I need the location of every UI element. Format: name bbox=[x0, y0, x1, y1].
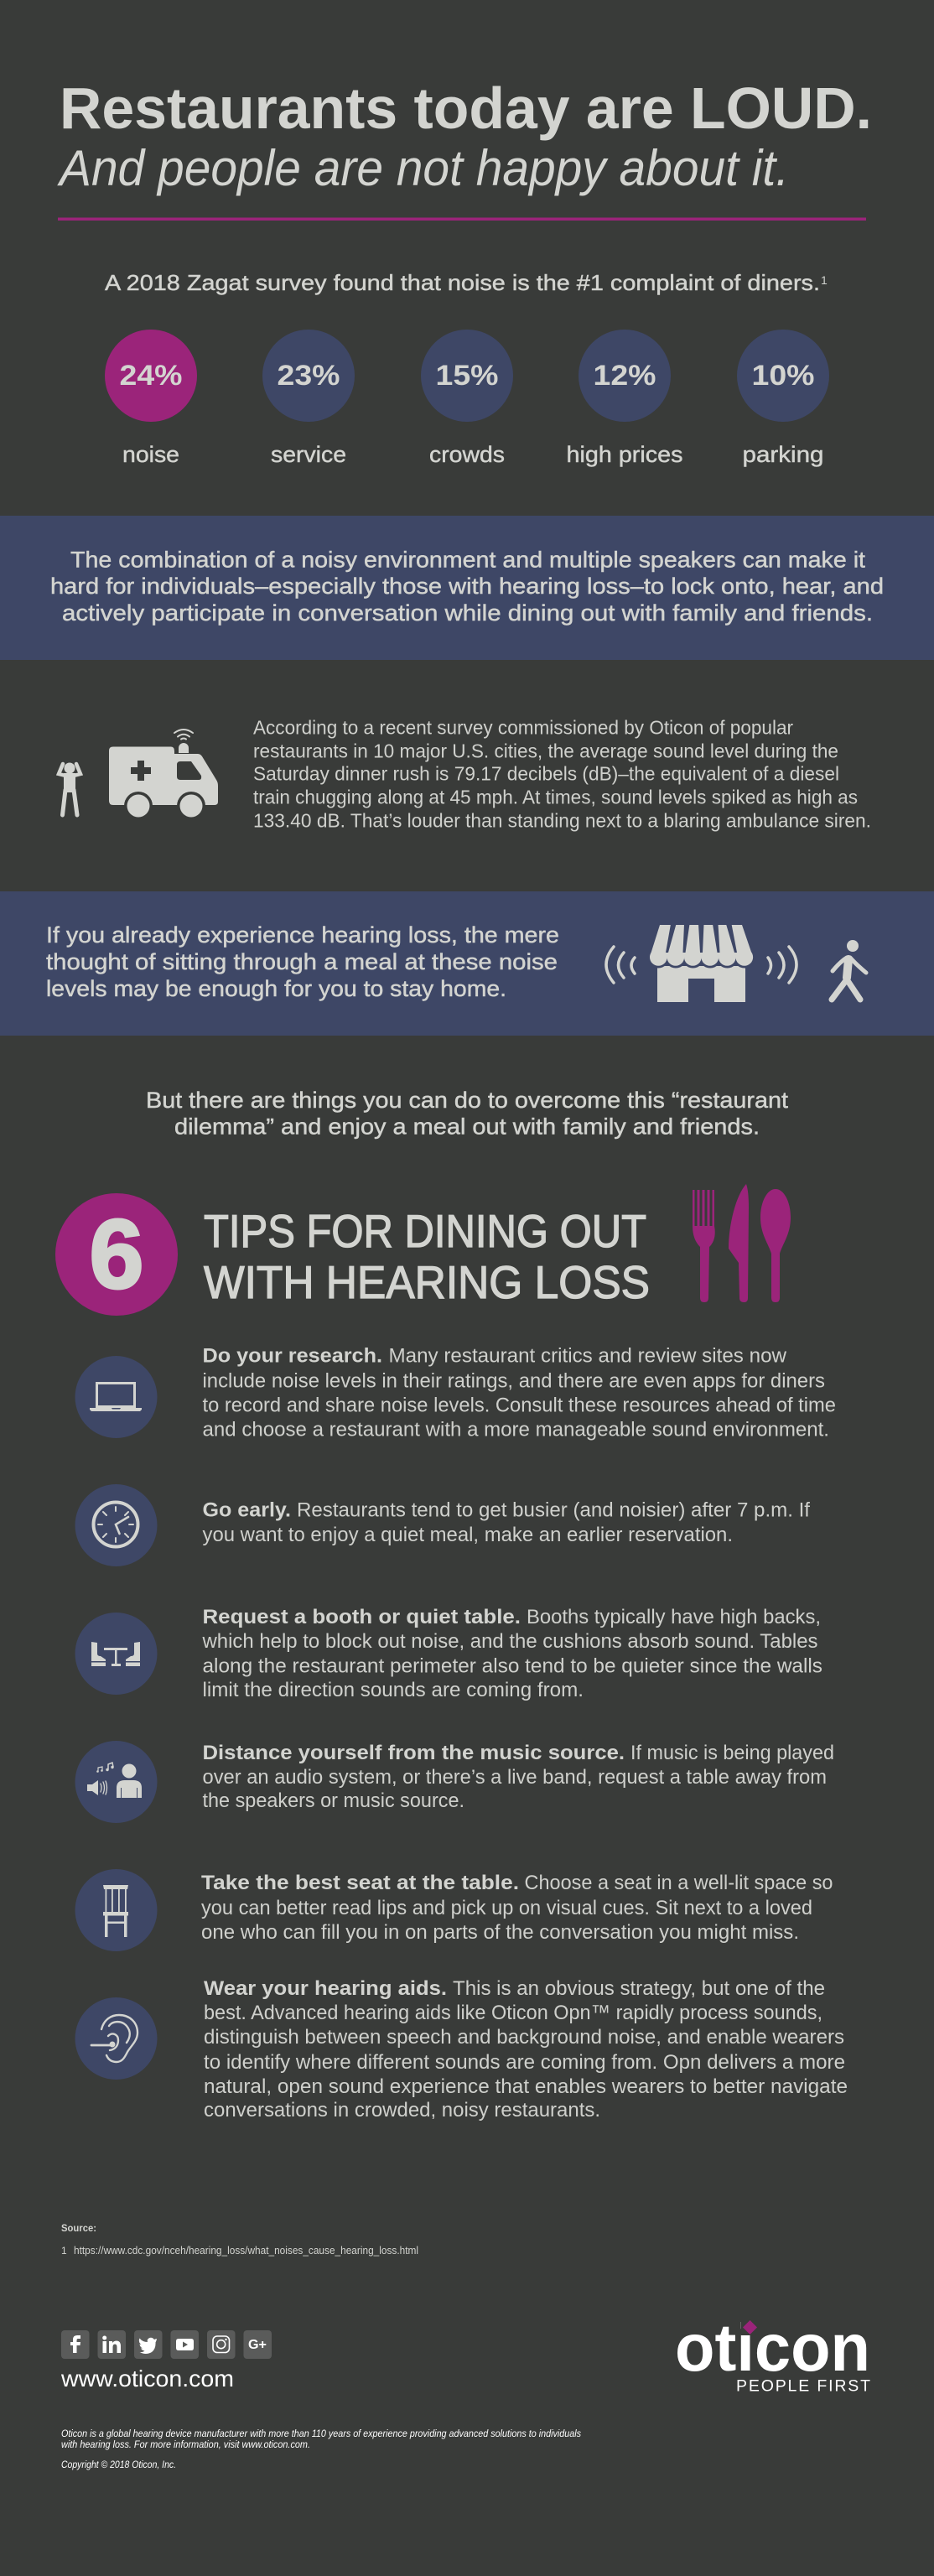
tip 3: request a booth: along the restaurant perimeter also tend to be quieter since the walls bbox=[203, 1655, 822, 1677]
survey intro text: A 2018 Zagat survey found that noise is the #1 complaint of diners. bbox=[105, 270, 820, 295]
stat: noise: noise bbox=[122, 442, 179, 467]
panel: combination of noise and speakers: The combination of a noisy environment and multiple speakers can make it bbox=[70, 547, 866, 572]
stat: crowds: 15% bbox=[436, 360, 498, 392]
tip 2: go early bbox=[75, 1484, 810, 1566]
icon: speaker, music notes and person bbox=[87, 1763, 142, 1798]
tip 4: distance from music source: the speakers or music source. bbox=[203, 1789, 464, 1812]
icon: google plus: G+ bbox=[248, 2338, 267, 2352]
panel: combination of noise and speakers: actively participate in conversation while dining out with family and friends. bbox=[62, 600, 873, 626]
stat: crowds bbox=[421, 330, 513, 467]
text: restaurant dilemma: But there are things you can do to overcome this “restaurant bbox=[146, 1088, 789, 1113]
stat: parking: parking bbox=[743, 442, 823, 467]
stat: high prices bbox=[567, 330, 682, 467]
stat: high prices: high prices bbox=[567, 442, 682, 467]
text: restaurant dilemma: dilemma” and enjoy a meal out with family and friends. bbox=[174, 1114, 760, 1139]
text: restaurant dilemma bbox=[146, 1088, 789, 1139]
panel: combination of noise and speakers bbox=[0, 516, 934, 660]
company boilerplate: with hearing loss. For more information, visit www.oticon.com. bbox=[61, 2440, 310, 2450]
stat: crowds: crowds bbox=[429, 442, 505, 467]
tip 3: request a booth bbox=[75, 1606, 822, 1701]
oticon logo: oticon bbox=[675, 2310, 870, 2385]
company boilerplate: Copyright © 2018 Oticon, Inc. bbox=[61, 2460, 176, 2470]
company boilerplate bbox=[61, 2429, 581, 2470]
icon: noisy restaurant bbox=[606, 924, 796, 1002]
icon: person walking away bbox=[832, 940, 866, 1000]
icon: youtube bbox=[171, 2330, 199, 2359]
tip 4: distance from music source: over an audio system, or there’s a live band, request a table away from bbox=[203, 1766, 827, 1789]
badge: number 6: 6 bbox=[89, 1199, 144, 1309]
stat: service: 23% bbox=[277, 360, 340, 392]
tip 4: distance from music source: If music is being played bbox=[630, 1742, 834, 1764]
icon: cutlery bbox=[693, 1184, 791, 1302]
tip 6: wear hearing aids: distinguish between speech and background noise, and enable wearers bbox=[204, 2026, 844, 2049]
tip 5: best seat bbox=[75, 1869, 833, 1951]
icon: instagram bbox=[207, 2330, 235, 2359]
text: stay home: If you already experience hearing loss, the mere bbox=[46, 922, 559, 948]
stat: parking: 10% bbox=[751, 360, 815, 392]
tip 5: best seat: one who can fill you in on parts of the conversation you might miss. bbox=[201, 1921, 799, 1944]
tip 1: do your research: to record and share noise levels. Consult these resources ahead of time bbox=[203, 1394, 836, 1417]
footnote marker: 1 bbox=[821, 273, 828, 287]
tip 3: request a booth: limit the direction sounds are coming from. bbox=[203, 1679, 584, 1701]
tip 6: wear hearing aids: conversations in crowded, noisy restaurants. bbox=[204, 2099, 600, 2122]
text block: Oticon survey: restaurants in 10 major U.S. cities, the average sound level during the bbox=[253, 740, 838, 761]
tip 5: best seat: Choose a seat in a well-lit space so bbox=[525, 1872, 833, 1894]
tip 1: do your research: include noise levels in their ratings, and there are even apps for diners bbox=[203, 1370, 825, 1392]
text: stay home: thought of sitting through a meal at these noise bbox=[46, 949, 558, 974]
tip 3: request a booth: which help to block out noise, and the cushions absorb sound. Tables bbox=[202, 1630, 818, 1653]
text block: Oticon survey: train chugging along at 45 mph. At times, sound levels spiked as high as bbox=[253, 787, 858, 808]
oticon logo: PEOPLE FIRST bbox=[736, 2376, 870, 2395]
company boilerplate: Oticon is a global hearing device manufacturer with more than 110 years of experience providing advanced solutions to individuals bbox=[61, 2429, 581, 2439]
icon: booth table bbox=[91, 1642, 140, 1666]
text: stay home: levels may be enough for you to stay home. bbox=[46, 976, 506, 1001]
icon: facebook bbox=[61, 2330, 89, 2359]
website url: www.oticon.com bbox=[60, 2366, 234, 2392]
social media icons bbox=[61, 2330, 272, 2359]
tip 3: request a booth: Booths typically have high backs, bbox=[527, 1606, 821, 1628]
panel: combination of noise and speakers: hard for individuals–especially those with hearing loss–to lock onto, hear, and bbox=[50, 574, 884, 599]
heading: tips bbox=[204, 1205, 650, 1308]
tip 6: wear hearing aids bbox=[75, 1977, 848, 2122]
tip 1: do your research: Many restaurant critics and review sites now bbox=[389, 1345, 786, 1367]
tip 1: do your research: and choose a restaurant with a more manageable sound environment. bbox=[203, 1419, 829, 1441]
tip 1: do your research: Do your research. bbox=[203, 1345, 382, 1367]
icon: clock bbox=[94, 1503, 138, 1546]
stat: noise bbox=[105, 330, 197, 467]
title: And people are not happy about it. bbox=[57, 140, 789, 196]
tip 2: go early: you want to enjoy a quiet meal, make an earlier reservation. bbox=[203, 1524, 733, 1546]
heading: tips: WITH HEARING LOSS bbox=[204, 1256, 650, 1308]
stat: parking bbox=[737, 330, 829, 467]
icon: linkedin bbox=[97, 2330, 126, 2359]
tip 6: wear hearing aids: to identify where different sounds are coming from. Opn delivers a more bbox=[204, 2051, 845, 2074]
icon: ear with hearing aid bbox=[91, 2015, 138, 2062]
tip 3: request a booth: Request a booth or quiet table. bbox=[203, 1606, 521, 1628]
source note: https://www.cdc.gov/nceh/hearing_loss/what_noises_cause_hearing_loss.html bbox=[74, 2245, 418, 2257]
stat: high prices: 12% bbox=[594, 360, 656, 392]
source note: 1 bbox=[61, 2245, 67, 2257]
text block: Oticon survey: 133.40 dB. That’s louder than standing next to a blaring ambulance siren. bbox=[253, 810, 871, 832]
icon: laptop bbox=[90, 1384, 142, 1411]
stat: noise: 24% bbox=[119, 360, 183, 392]
tip 4: distance from music source bbox=[75, 1741, 834, 1823]
tip 5: best seat: Take the best seat at the table. bbox=[201, 1872, 519, 1894]
source note: Source: bbox=[61, 2222, 96, 2234]
panel: hearing loss stay home bbox=[0, 891, 934, 1036]
text block: Oticon survey bbox=[253, 716, 871, 832]
icon: ambulance bbox=[109, 730, 218, 820]
source note bbox=[61, 2222, 418, 2257]
tip 5: best seat: you can better read lips and pick up on visual cues. Sit next to a loved bbox=[201, 1897, 812, 1919]
text block: Oticon survey: Saturday dinner rush is 79.17 decibels (dB)–the equivalent of a diesel bbox=[253, 763, 839, 785]
stat: service: service bbox=[271, 442, 346, 467]
text: stay home bbox=[46, 922, 559, 1001]
icon: google plus bbox=[243, 2330, 272, 2359]
title: Restaurants today are LOUD. bbox=[60, 75, 872, 141]
title bbox=[57, 75, 872, 196]
text block: Oticon survey: According to a recent survey commissioned by Oticon of popular bbox=[253, 716, 793, 738]
badge: number 6 bbox=[55, 1193, 178, 1316]
tip 6: wear hearing aids: natural, open sound experience that enables wearers to better navigate bbox=[204, 2075, 848, 2098]
tip 4: distance from music source: Distance yourself from the music source. bbox=[203, 1742, 625, 1764]
tip 2: go early: Restaurants tend to get busier (and noisier) after 7 p.m. If bbox=[297, 1499, 810, 1521]
tip 6: wear hearing aids: Wear your hearing aids. bbox=[204, 1977, 447, 2000]
stat: service bbox=[262, 330, 355, 467]
tip 2: go early: Go early. bbox=[203, 1499, 291, 1521]
tip 1: do your research bbox=[75, 1345, 836, 1441]
tip 6: wear hearing aids: This is an obvious strategy, but one of the bbox=[453, 1977, 825, 2000]
heading: tips: TIPS FOR DINING OUT bbox=[204, 1205, 646, 1257]
tip 6: wear hearing aids: best. Advanced hearing aids like Oticon Opn™ rapidly process sounds, bbox=[204, 2002, 822, 2024]
icon: person covering ears bbox=[59, 763, 80, 815]
icon: twitter bbox=[134, 2330, 163, 2359]
icon: chair bbox=[103, 1885, 128, 1937]
